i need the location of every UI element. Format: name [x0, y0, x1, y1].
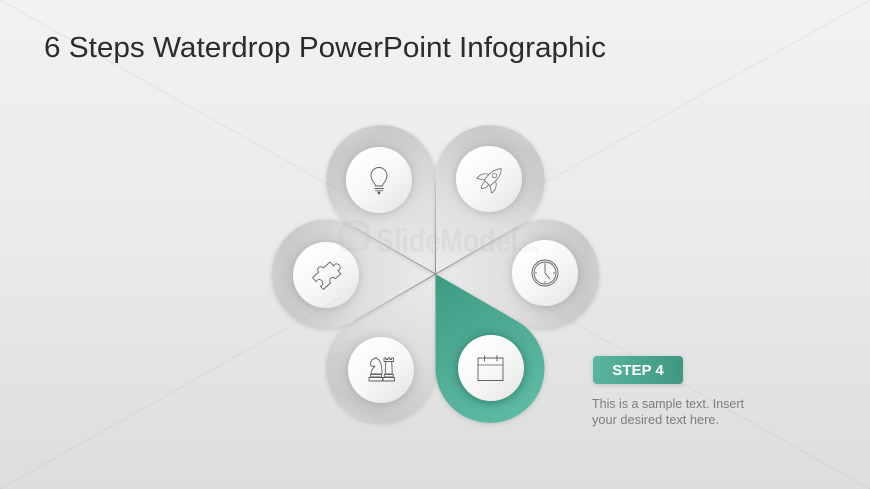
disc: chess — [348, 337, 414, 403]
drop: step 1 bulb — [307, 105, 483, 301]
disc: puzzle — [293, 242, 359, 308]
disc: bulb — [346, 147, 412, 213]
icon: clock — [532, 260, 558, 286]
step description — [592, 397, 745, 427]
icon: chess pieces — [369, 358, 394, 381]
step description: your desired text here. — [592, 413, 719, 427]
title: 6 Steps Waterdrop PowerPoint Infographic — [44, 32, 606, 64]
disc: clock — [512, 240, 578, 306]
disc: calendar — [458, 335, 524, 401]
drop: step 2 rocket — [388, 105, 564, 301]
drop: step 5 puzzle — [272, 220, 436, 328]
drop: step 3 clock — [436, 220, 599, 328]
watermark: SlideModel — [376, 222, 518, 259]
step label badge: STEP 4 — [612, 362, 664, 379]
step label badge — [593, 356, 683, 384]
icon: puzzle piece — [310, 256, 344, 290]
icon: light bulb — [371, 168, 387, 194]
step description: This is a sample text. Insert — [592, 397, 745, 411]
disc: rocket — [456, 146, 522, 212]
watermark: .com — [518, 244, 538, 254]
drop: step 4 calendar active — [388, 247, 564, 443]
drop: step 6 chess — [307, 247, 483, 443]
icon: calendar — [478, 356, 503, 380]
icon: rocket — [474, 161, 509, 196]
